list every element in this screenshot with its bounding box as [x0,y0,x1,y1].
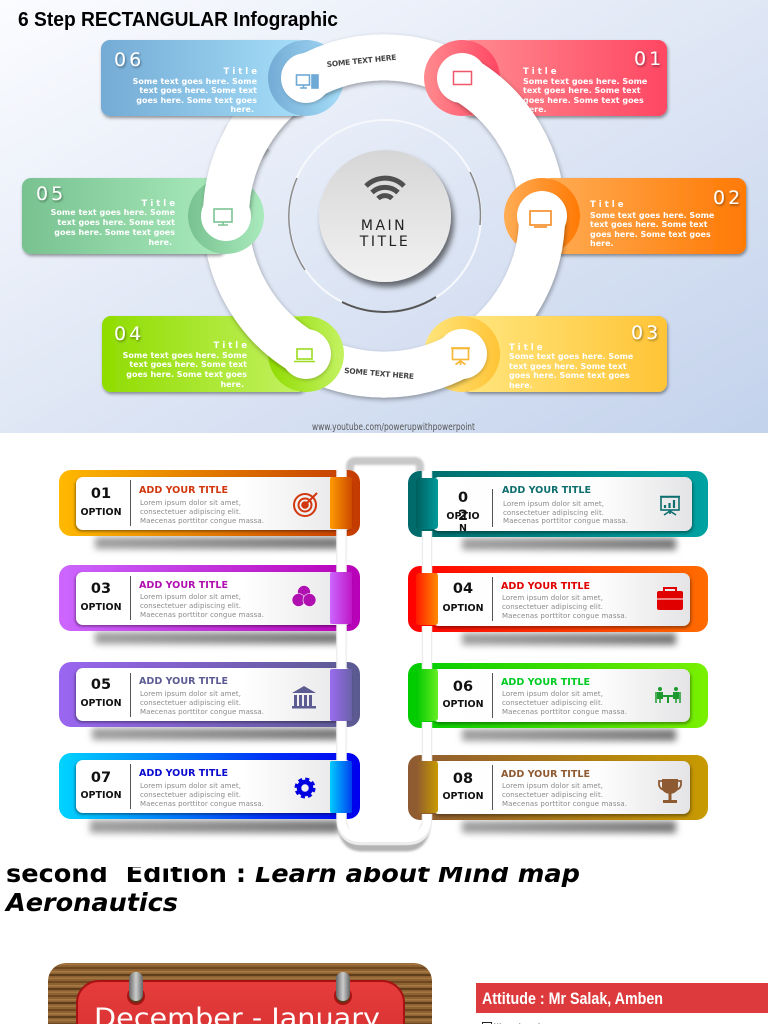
icon: wifi [366,178,404,198]
card 02: 0 [458,490,468,506]
step 06: here. [230,105,254,114]
card 01: ADD YOUR TITLE [139,485,228,496]
card 08: OPTION [442,791,484,802]
card 03: consectetuer adipiscing elit. [140,602,241,610]
card 02: ADD YOUR TITLE [502,485,591,496]
card 01: consectetuer adipiscing elit. [140,508,241,516]
ring band from step 05 to step 06, upper half [247,78,306,137]
inner metallic ring [289,120,481,312]
card 02: Maecenas porttitor congue massa. [503,517,628,525]
step 02: Some text goes here. Some [590,211,715,220]
icon: meeting [656,687,680,703]
icon: gear [296,779,314,797]
card 04: 04 [453,581,473,597]
card 03 [59,565,360,644]
card 04: OPTION [442,603,484,614]
step 06: Title [224,67,260,77]
step 01: 01 [634,48,664,70]
step 04: Some text goes here. Some [123,351,248,360]
card 01: OPTION [80,507,122,518]
icon: target [294,493,317,516]
icon: monitor [530,211,551,227]
card 02: Lorem ipsum dolor sit amet, [503,500,604,508]
icon: trophy [659,779,681,803]
card 07: ADD YOUR TITLE [139,768,228,779]
step 02: Title [590,200,626,210]
step 04: Title [214,341,250,351]
card 07: 07 [91,770,111,786]
icon: venn circles [292,586,316,606]
card 05: Maecenas porttitor congue massa. [140,708,264,716]
card 07: Lorem ipsum dolor sit amet, [140,782,241,790]
card 02: consectetuer adipiscing elit. [503,509,604,517]
step 04: text goes here. Some text [129,360,247,369]
step 03: text goes here. Some text [509,362,627,371]
center disk: main title [319,150,451,282]
card 06: OPTION [442,699,484,710]
step 01: Some text goes here. Some [523,77,648,86]
card 08: ADD YOUR TITLE [501,769,590,780]
connector arch top [350,461,420,472]
card 04: Lorem ipsum dolor sit amet, [502,594,603,602]
step 03 [306,316,667,392]
step 03: Some text goes here. Some [509,352,634,361]
card 04: Maecenas porttitor congue massa. [502,612,627,620]
panel: 8 option list [59,461,708,847]
heading: second edition: second Edition : Learn about Mind map [6,859,580,888]
card 02: 2 [458,508,468,524]
label: some text here, bottom: SOME TEXT HERE [344,366,414,381]
step 02 [462,178,746,354]
step 02: here. [590,239,614,248]
card 01: Maecenas porttitor congue massa. [140,517,264,525]
step 06 [101,40,462,116]
step 01: here. [523,105,547,114]
calendar [48,963,432,1024]
step 06: 06 [114,49,144,71]
attitude banner [476,983,768,1024]
card 05: Lorem ipsum dolor sit amet, [140,690,241,698]
card 03: 03 [91,581,111,597]
step 03: 03 [631,322,661,344]
title: 6 Step RECTANGULAR Infographic [18,9,338,31]
card 01: Lorem ipsum dolor sit amet, [140,499,241,507]
panel: 6 step circular infographic [0,0,768,433]
step 02: text goes here. Some text [590,220,708,229]
source url: www.youtube.com/powerupwithpowerpoint [312,422,475,433]
card 02: N [459,523,467,534]
step 04: here. [220,380,244,389]
card 05: ADD YOUR TITLE [139,676,228,687]
card 07: consectetuer adipiscing elit. [140,791,241,799]
card 04: consectetuer adipiscing elit. [502,603,603,611]
card 06 [408,663,708,741]
step 05: Some text goes here. Some [51,208,176,217]
step 01 [424,40,667,216]
card 03: Maecenas porttitor congue massa. [140,611,264,619]
step 04: 04 [114,323,144,345]
step 02: 02 [713,187,743,209]
step 03: goes here. Some text goes [509,371,630,380]
icon: laptop [294,349,315,362]
step 06: goes here. Some text goes [136,96,257,105]
card 05: 05 [91,677,111,693]
card 06: ADD YOUR TITLE [501,677,590,688]
step 03: Title [509,343,545,353]
icon: easel [451,348,470,365]
card 05: consectetuer adipiscing elit. [140,699,241,707]
card 03: Lorem ipsum dolor sit amet, [140,593,241,601]
step 04 [102,216,344,392]
step 05: here. [148,238,172,247]
card 08 [408,755,708,833]
center disk: main title: TITLE [359,234,410,250]
card 01 [59,470,360,549]
card 07: Maecenas porttitor congue massa. [140,800,264,808]
card 06: 06 [453,679,473,695]
card 07: OPTION [80,790,122,801]
card 08: consectetuer adipiscing elit. [502,791,603,799]
card 08: 08 [453,771,473,787]
card 03: ADD YOUR TITLE [139,580,228,591]
step 03: here. [509,381,533,390]
step 06: text goes here. Some text [139,86,257,95]
step 05: goes here. Some text goes [54,228,175,237]
card 03: OPTION [80,602,122,613]
step 05: 05 [36,183,66,205]
label: some text here, top: SOME TEXT HERE [326,53,397,69]
card 05 [59,662,360,740]
step 01: goes here. Some text goes [523,96,644,105]
step 01: text goes here. Some text [523,86,641,95]
connector strips [342,470,427,847]
heading: second edition: Aeronautics [4,888,178,917]
card 06: consectetuer adipiscing elit. [502,699,603,707]
card 02 [408,471,708,550]
step 06: Some text goes here. Some [133,77,258,86]
icon: briefcase [657,588,683,610]
card 07 [59,753,360,833]
card 06: Lorem ipsum dolor sit amet, [502,690,603,698]
step 05 [22,125,264,254]
card 01: 01 [91,486,111,502]
step 04: goes here. Some text goes [126,370,247,379]
icon: monitor [214,209,232,225]
card 02: OPTIO [446,511,480,522]
card 08: Lorem ipsum dolor sit amet, [502,782,603,790]
main title text: MAIN [361,218,407,234]
step 05: text goes here. Some text [57,218,175,227]
step 05: Title [142,199,178,209]
attitude banner: Attitude : Mr Salak, Amben [482,989,663,1008]
step 01: Title [523,67,559,77]
icon: presentation chart [660,496,680,515]
card 06: Maecenas porttitor congue massa. [502,708,627,716]
step 02: goes here. Some text goes [590,230,711,239]
icon: bank [292,686,316,708]
card 04 [408,566,708,645]
icon: computer [296,75,318,88]
icon: rectangle screen [454,72,472,84]
card 04: ADD YOUR TITLE [501,581,590,592]
card 05: OPTION [80,698,122,709]
list item [482,1022,492,1024]
heading: second edition [0,858,768,917]
card 08: Maecenas porttitor congue massa. [502,800,627,808]
